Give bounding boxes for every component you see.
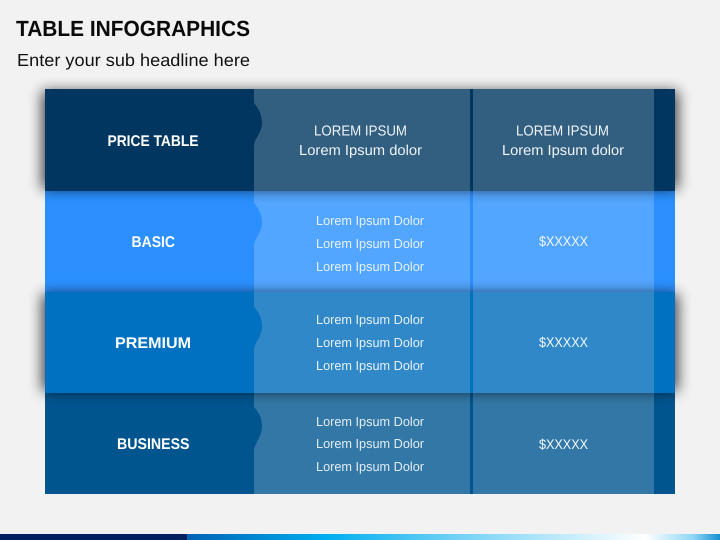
business features: Lorem Ipsum Dolor xyxy=(316,414,425,429)
row: basic xyxy=(45,191,675,292)
business features: Lorem Ipsum Dolor xyxy=(316,436,425,451)
column 1 header xyxy=(299,124,422,159)
basic features xyxy=(316,213,425,274)
subtitle: Enter your sub headline here xyxy=(17,50,250,70)
row: premium xyxy=(45,292,675,393)
premium features: Lorem Ipsum Dolor xyxy=(316,312,425,327)
premium features: Lorem Ipsum Dolor xyxy=(316,358,425,373)
business features xyxy=(316,414,425,474)
shadow: premium row xyxy=(42,294,678,391)
row: business xyxy=(45,393,675,494)
label: premium: PREMIUM xyxy=(115,335,191,352)
column 2 header xyxy=(502,124,624,159)
column 2 header: Lorem Ipsum dolor xyxy=(502,143,624,159)
label: price table: PRICE TABLE xyxy=(108,133,198,150)
row: price table xyxy=(45,89,675,191)
basic features: Lorem Ipsum Dolor xyxy=(316,259,425,274)
basic price: $XXXXX xyxy=(539,233,589,249)
shadow: price table row xyxy=(42,91,678,189)
basic features: Lorem Ipsum Dolor xyxy=(316,236,425,251)
premium price: $XXXXX xyxy=(539,334,589,350)
business features: Lorem Ipsum Dolor xyxy=(316,459,425,474)
basic features: Lorem Ipsum Dolor xyxy=(316,213,425,228)
label: business: BUSINESS xyxy=(117,436,190,453)
business price: $XXXXX xyxy=(539,436,589,452)
premium features xyxy=(316,312,425,373)
column 1 header: LOREM IPSUM xyxy=(314,124,407,140)
premium features: Lorem Ipsum Dolor xyxy=(316,335,425,350)
label: basic: BASIC xyxy=(132,234,175,251)
title: TABLE INFOGRAPHICS xyxy=(16,16,250,41)
footer bar xyxy=(0,534,720,540)
column 1 header: Lorem Ipsum dolor xyxy=(299,143,422,159)
column 2 header: LOREM IPSUM xyxy=(516,124,609,140)
